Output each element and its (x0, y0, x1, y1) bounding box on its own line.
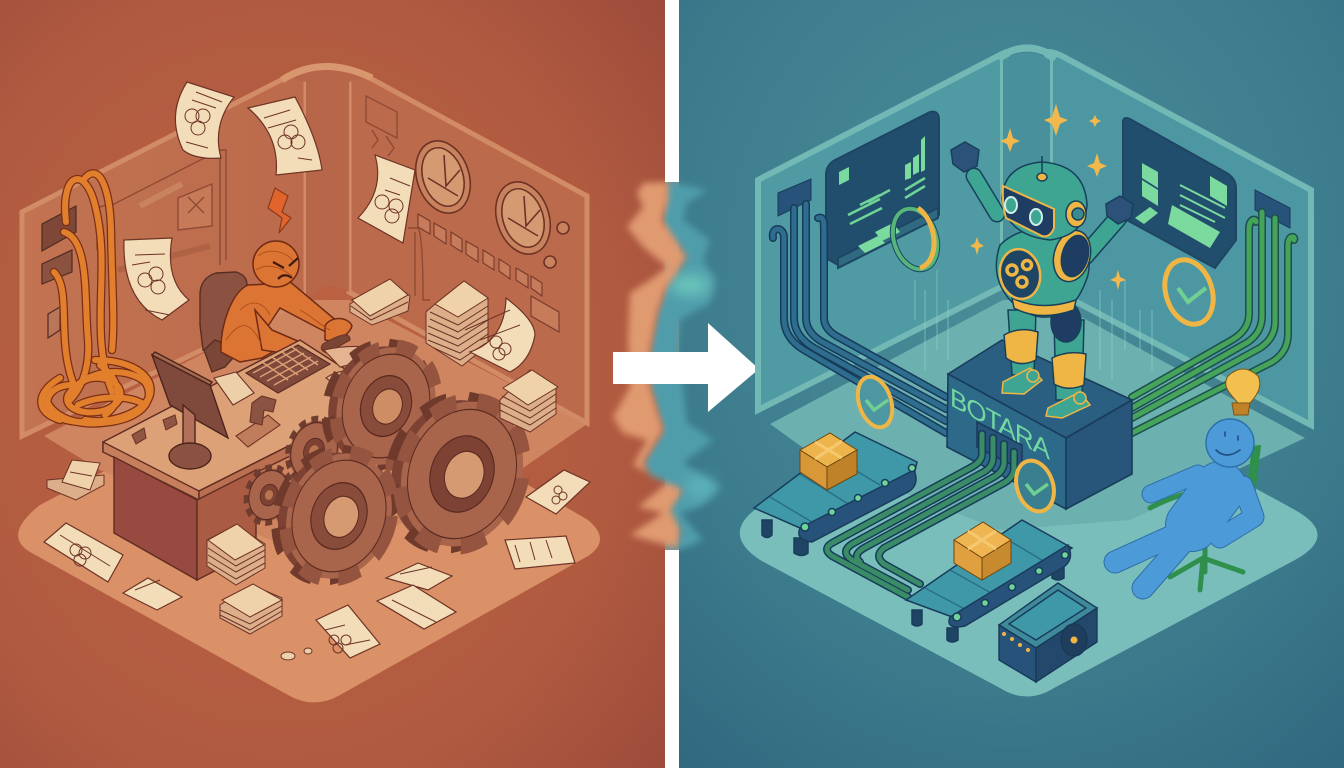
left wall (22, 73, 306, 436)
wall sockets (42, 206, 76, 338)
desk (103, 340, 362, 580)
BOTARA label: BOTARA (950, 382, 1050, 466)
wall details: conduit and panel (97, 96, 430, 300)
right monitor (1123, 118, 1236, 268)
paper text lines and doodles (60, 92, 567, 653)
cable bundles (773, 204, 1294, 433)
left monitor (826, 112, 939, 268)
conveyor lower (906, 520, 1072, 642)
robot chest emblem (996, 246, 1044, 302)
progress rings (885, 203, 945, 275)
arrow: transformation direction (613, 323, 759, 412)
robot fists (951, 142, 979, 172)
tangled orange cables (41, 173, 151, 423)
right wall (349, 73, 587, 423)
computer monitor (152, 352, 228, 469)
wall corner (1003, 52, 1050, 288)
sparkle stars (970, 104, 1126, 290)
flying papers (44, 82, 590, 658)
panel: automated room (740, 48, 1318, 696)
package left (800, 433, 857, 490)
light bulb (1226, 369, 1260, 415)
robot head (1002, 162, 1087, 240)
wavy transition between panels (613, 180, 720, 552)
large gears (241, 330, 543, 596)
relaxed person (1115, 419, 1254, 588)
floor cables (827, 434, 1014, 597)
gear upper (312, 330, 452, 481)
lightning bolt (268, 188, 291, 233)
check badge left cables (852, 372, 898, 432)
panel: after background (678, 0, 1344, 768)
conveyor left (754, 432, 917, 556)
floor back edge (770, 300, 1305, 530)
data glow lines (915, 230, 1152, 380)
mouse and desk clutter (132, 335, 366, 447)
divider line (665, 0, 679, 768)
gauge dials (407, 134, 569, 268)
left glass wall (758, 52, 1008, 410)
relaxed chair (1150, 450, 1256, 590)
gear small center (281, 414, 347, 488)
floor (740, 372, 1318, 696)
generator box (999, 583, 1097, 682)
panel: chaotic office room (18, 66, 600, 702)
robot torso (996, 228, 1089, 317)
BOTARA pedestal (947, 340, 1132, 509)
frustrated worker (221, 241, 352, 362)
gear lower (261, 436, 409, 596)
switch row (418, 214, 559, 332)
check badge pedestal (1010, 456, 1060, 516)
office chair (200, 272, 247, 372)
robot (951, 142, 1133, 418)
robot arms (974, 176, 997, 214)
floor pebbles (281, 648, 312, 660)
check badge right wall (1157, 254, 1221, 330)
robot shoulder ring (1048, 226, 1096, 286)
keyboard (246, 345, 330, 393)
left monitor content (839, 136, 925, 253)
package lower (954, 522, 1011, 580)
floor (18, 368, 600, 702)
right monitor content (1135, 163, 1227, 248)
gear large right (371, 381, 543, 566)
right glass wall (1047, 52, 1311, 425)
panel: before background (0, 0, 666, 768)
floor inner tone (44, 300, 587, 560)
robot legs (1008, 310, 1036, 375)
paper stacks (47, 279, 558, 634)
gear small left (241, 463, 297, 527)
wall corner (285, 66, 370, 300)
wall pipe connectors (778, 179, 1290, 228)
